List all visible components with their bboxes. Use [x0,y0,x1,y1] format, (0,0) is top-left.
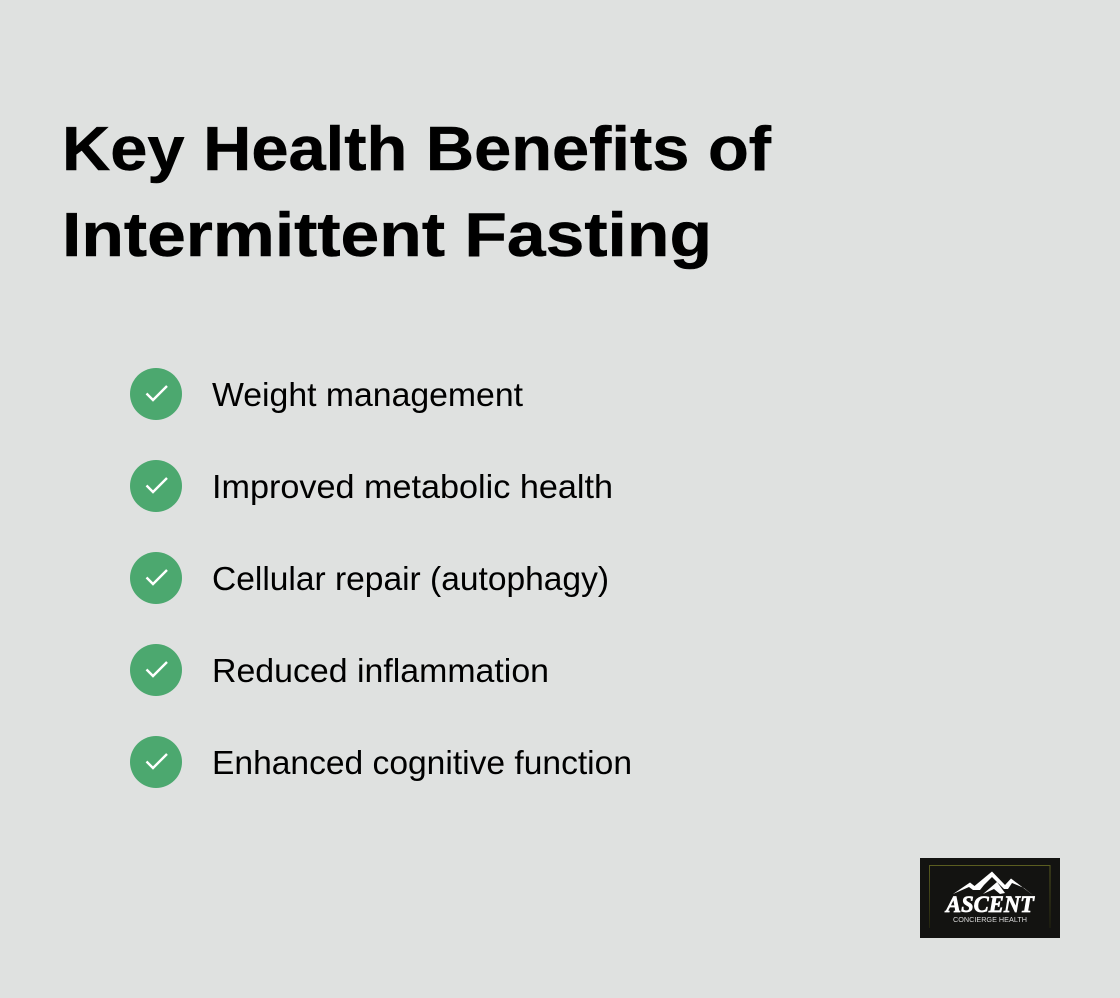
item: reduced inflammation [130,644,549,696]
item: enhanced cognitive function [130,736,632,788]
benefits list [130,368,632,788]
item: improved metabolic health [130,460,613,512]
icon: mountains [953,872,1034,896]
logo tagline: CONCIERGE HEALTH [953,917,1027,924]
title: Key Health Benefits of [62,115,771,184]
item: weight management: Weight management [212,376,523,413]
item: cellular repair [130,552,609,604]
item: enhanced cognitive function: Enhanced cognitive function [212,744,632,781]
item: improved metabolic health: Improved metabolic health [212,468,613,505]
item: reduced inflammation: Reduced inflammation [212,652,549,689]
item: cellular repair: Cellular repair (autophagy) [212,560,609,597]
title: Intermittent Fasting [62,201,712,270]
logo: Ascent Concierge Health [920,858,1060,938]
logo wordmark: ASCENT [944,892,1035,917]
title [62,115,771,270]
item: weight management [130,368,523,420]
